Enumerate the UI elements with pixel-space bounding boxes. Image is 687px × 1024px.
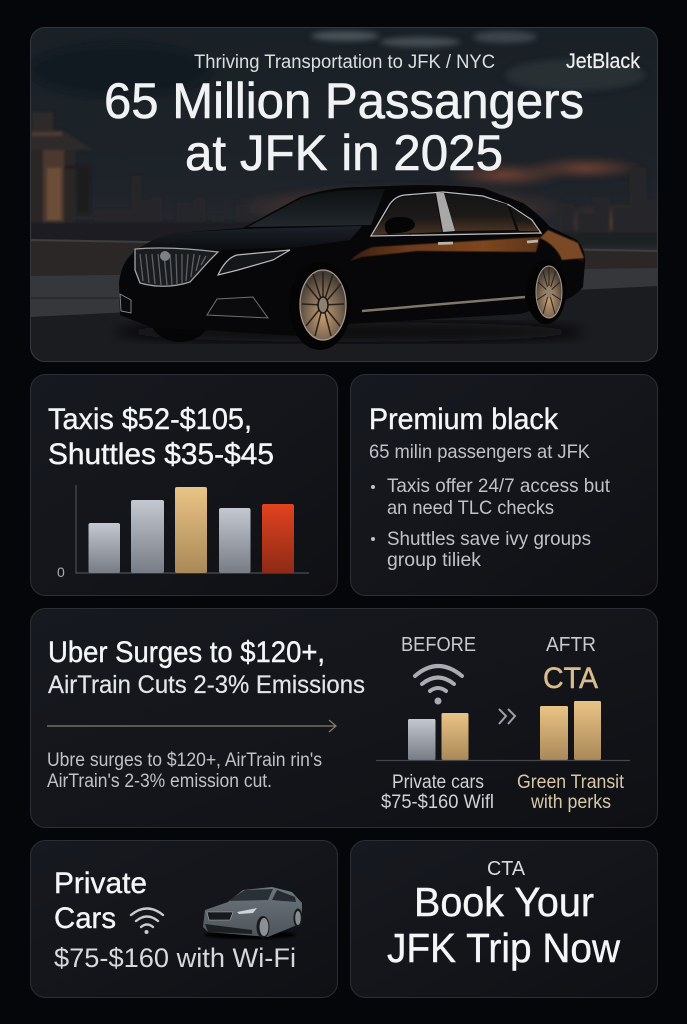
- body text: [47, 750, 322, 792]
- heading: AirTrain Cuts 2-3% Emissions: [48, 671, 365, 699]
- side panel upper tone: [540, 234, 584, 262]
- chrome sill: [362, 297, 525, 311]
- icon: chevrons: [499, 709, 515, 724]
- rear fender reflection: [540, 230, 584, 260]
- far front wheel: [153, 328, 206, 342]
- left fog lamp: [120, 294, 131, 313]
- icon: wifi: [415, 666, 462, 704]
- private cars caption: [381, 772, 494, 813]
- grille: [135, 248, 218, 286]
- fog lamp: [207, 297, 268, 318]
- bullet list: group tiliek: [387, 549, 481, 571]
- door handles: [438, 241, 538, 244]
- icon: wifi: [131, 908, 163, 934]
- private cars caption: Private cars: [392, 772, 484, 793]
- panel: private cars: [30, 840, 338, 998]
- windshield: [248, 189, 385, 227]
- bar chart: 0: [57, 564, 65, 580]
- bullet list: Taxis offer 24/7 access but: [387, 475, 611, 497]
- arrow: [47, 720, 336, 732]
- hero title: at JFK in 2025: [185, 125, 503, 181]
- panel: premium black: [350, 374, 658, 596]
- clouds: [30, 31, 675, 240]
- heading: Uber Surges to $120+,: [48, 636, 325, 669]
- price text: $75-$160 with Wi-Fi: [54, 943, 296, 973]
- before label: BEFORE: [401, 634, 476, 656]
- panel: call to action: [350, 840, 658, 998]
- icon: silver car: [203, 887, 302, 939]
- limousine: [115, 185, 585, 350]
- heading: Shuttles $35-$45: [48, 438, 274, 471]
- heading: Premium black: [369, 403, 559, 436]
- green transit caption: [517, 772, 625, 813]
- green transit caption: Green Transit: [517, 772, 625, 793]
- CTA label: CTA: [487, 858, 526, 880]
- hero title: 65 Million Passangers: [104, 73, 584, 129]
- CTA heading: JFK Trip Now: [387, 925, 620, 971]
- body: [119, 185, 585, 336]
- hero kicker: Thriving Transportation to JFK / NYC: [194, 52, 495, 73]
- side windows: [372, 194, 442, 235]
- heading: Cars: [54, 902, 116, 935]
- CTA heading: [387, 879, 620, 971]
- heading: [48, 403, 274, 471]
- headlight: [218, 250, 290, 275]
- hero title: [104, 73, 584, 181]
- orange side reflection: [350, 237, 540, 261]
- rear wheel: [530, 300, 566, 324]
- bullet list: [371, 475, 611, 571]
- road and barrier: [31, 241, 657, 276]
- panel: uber and airtrain comparison: [30, 608, 658, 828]
- brand logo: JetBlack: [566, 50, 640, 73]
- bar chart: [57, 485, 309, 580]
- bullet list: Shuttles save ivy groups: [387, 528, 591, 550]
- mirror: [385, 217, 415, 234]
- CTA label: CTA: [543, 662, 598, 695]
- panel: taxis and shuttles: [30, 374, 338, 596]
- heading: Private: [54, 867, 147, 900]
- subheading: 65 milin passengers at JFK: [369, 442, 590, 463]
- CTA heading: Book Your: [414, 879, 594, 925]
- private cars caption: $75-$160 Wifl: [381, 792, 494, 813]
- after label: AFTR: [546, 634, 596, 656]
- city skyline: [30, 168, 658, 246]
- badge: [160, 251, 170, 261]
- before and after bars: [376, 701, 630, 760]
- chrome window frame: [371, 192, 541, 236]
- bullet list: an need TLC checks: [387, 497, 554, 519]
- left tower: [30, 112, 93, 222]
- heading: [48, 636, 365, 699]
- body text: Ubre surges to $120+, AirTrain rin's: [47, 750, 322, 771]
- heading: Taxis $52-$105,: [48, 403, 252, 436]
- heading: [54, 867, 147, 935]
- front wheel: [298, 324, 348, 350]
- hero panel: [30, 27, 675, 362]
- hood highlight: [132, 226, 362, 254]
- green transit caption: with perks: [530, 792, 611, 813]
- body text: AirTrain's 2-3% emission cut.: [47, 771, 272, 792]
